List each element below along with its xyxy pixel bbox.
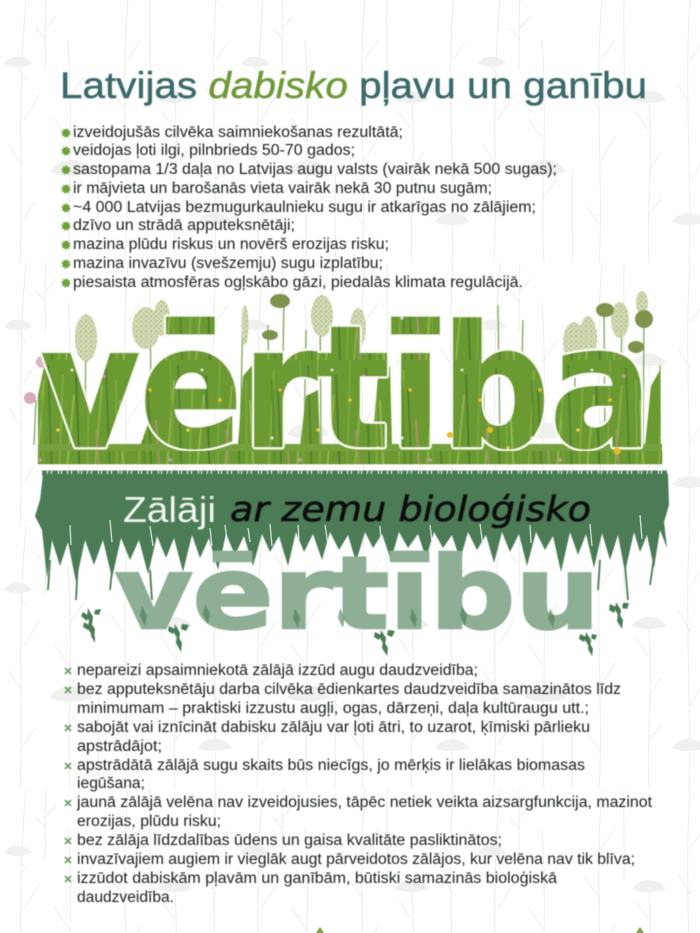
title: Latvijas dabisko pļavu un ganību — [60, 65, 647, 106]
heading: ar zemu bioloģisko: ar zemu bioloģisko — [230, 490, 591, 530]
sprig 4 — [579, 632, 597, 656]
list: benefits of natural grasslands — [62, 124, 557, 291]
cross item 5 — [65, 794, 653, 830]
grass tips at bottom edge — [316, 927, 644, 933]
dark green inverted grass band — [35, 473, 669, 600]
sprigs over word — [140, 604, 555, 628]
cross item 6: bez zālāja līdzdalības ūdens un gaisa kvalitāte pasliktinātos; — [77, 832, 502, 849]
cross item 3: sabojāt vai iznīcināt dabisku zālāju var ļoti ātri, to uzarot, ķīmiski pārlieku — [77, 719, 590, 736]
thin trailing blades — [48, 550, 655, 600]
sprig 3 — [374, 630, 395, 656]
cross item 2 — [65, 681, 621, 717]
cross item 1: nepareizi apsaimniekotā zālājā izzūd augu daudzveidība; — [77, 662, 478, 679]
bullet item 7: mazina plūdu riskus un novērš erozijas risku; — [73, 236, 389, 253]
cross item 7: invazīvajiem augiem ir vieglāk augt pārveidotos zālājos, kur velēna nav tik blīva; — [77, 851, 635, 868]
word: vērtību pale green: vērtību — [115, 535, 600, 652]
white outline of the word: vērtība — [41, 290, 652, 486]
cross item 8: daudzveidība. — [77, 889, 174, 906]
bullet item 6: dzīvo un strādā apputeksnētāji; — [73, 217, 295, 234]
meadow fill of the word: vērtība — [41, 290, 652, 486]
sprig 2 — [168, 624, 189, 652]
bullet item 2: veidojas ļoti ilgi, pilnbrieds 50-70 gados; — [73, 142, 355, 159]
meadow strip under the word — [38, 427, 662, 464]
cross item 8: izzūdot dabiskām pļavām un ganībām, būtiski samazinās bioloģiskā — [77, 870, 557, 887]
hanging leaf sprigs — [81, 602, 629, 656]
bullet item 5: ~4 000 Latvijas bezmugurkaulnieku sugu ir atkarīgas no zālājiem; — [73, 199, 536, 216]
bullet item 3: sastopama 1/3 daļa no Latvijas augu valsts (vairāk nekā 500 sugas); — [73, 161, 557, 178]
cross item 3 — [65, 719, 590, 755]
cross item 3: apstrādājot; — [77, 738, 162, 755]
feathery panicles — [75, 291, 648, 362]
round seed heads — [262, 294, 653, 353]
cross item 4: iegūšana; — [77, 775, 145, 792]
cross item 8 — [65, 870, 557, 906]
bullet item 4: ir mājvieta un barošanās vieta vairāk nekā 30 putnu sugām; — [73, 180, 492, 197]
bullet item 9: piesaista atmosfēras ogļskābo gāzi, piedalās klimata regulācijā. — [73, 274, 523, 291]
cross item 4 — [65, 757, 585, 792]
cross item 2: bez apputeksnētāju darba cilvēka ēdienkartes daudzveidība samazinātos līdz — [77, 681, 621, 698]
hanging blades — [35, 474, 669, 582]
bullet item 8: mazina invazīvu (svešzemju) sugu izplatību; — [73, 255, 383, 272]
cross item 4: apstrādātā zālājā sugu skaits būs niecīgs, jo mērķis ir lielākas biomasas — [77, 757, 585, 774]
sprig 5 — [609, 602, 629, 629]
band top jagged edge — [42, 470, 668, 476]
green foliage between letters — [38, 356, 661, 464]
cross item 5: erozijas, plūdu risku; — [77, 813, 221, 830]
list: consequences of low biodiversity grasslands — [65, 662, 653, 906]
cross item 2: minimumam – praktiski izzustu augļi, ogas, dārzeņi, daļa kultūraugu utt.; — [77, 700, 589, 717]
illustration: wild meadow plants behind the word — [24, 291, 662, 464]
pink flowers on the left — [24, 356, 96, 447]
grasses and stems — [34, 305, 660, 445]
heading: Zālāji: Zālāji — [123, 489, 216, 530]
cross item 5: jaunā zālājā velēna nav izveidojusies, tāpēc netiek veikta aizsargfunkcija, mazinot — [76, 794, 653, 811]
sprig left — [81, 608, 101, 643]
word: vērtība filled with meadow texture — [41, 290, 652, 486]
pale streaks in the band — [70, 515, 642, 547]
bullet item 1: izveidojušās cilvēka saimniekošanas rezultātā; — [73, 124, 403, 141]
